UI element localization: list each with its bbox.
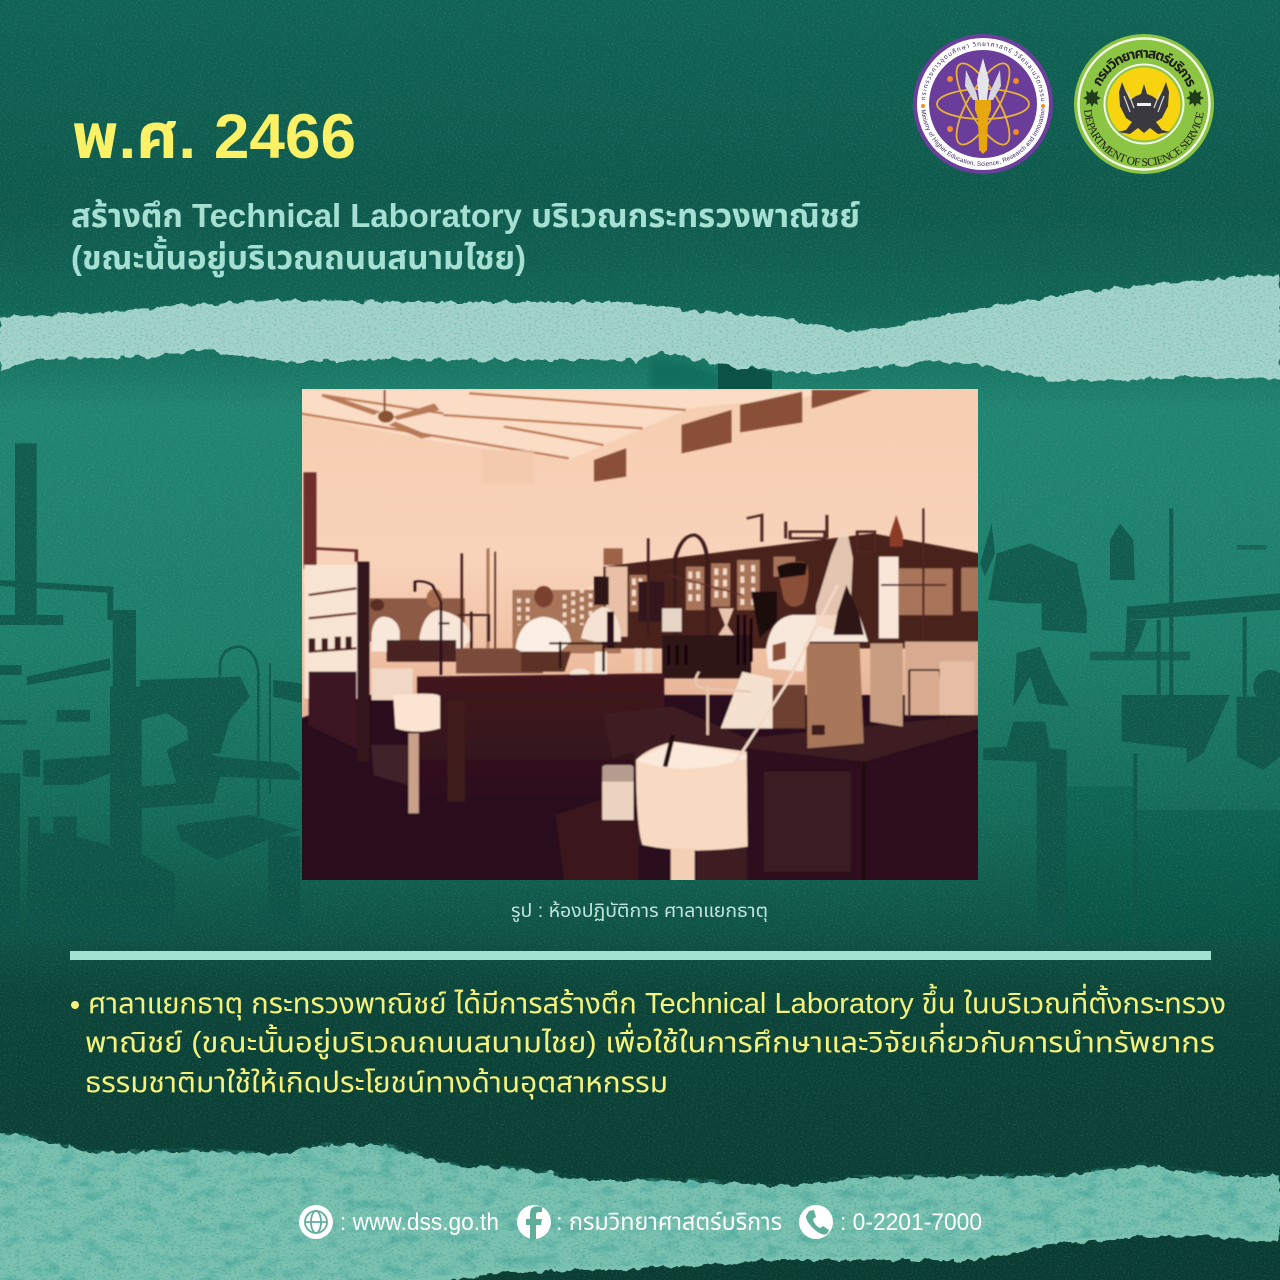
- top shelf glassware: [746, 512, 878, 543]
- subtitle: สร้างตึก Technical Laboratory บริเวณกระทรวงพาณิชย์: [71, 197, 860, 234]
- subtitle: (ขณะนั้นอยู่บริเวณถนนสนามไชย): [71, 235, 526, 278]
- apparatus on bench: [721, 672, 773, 728]
- front bench: [664, 706, 978, 762]
- back wall, mid-room: [369, 598, 465, 642]
- big white sink: [636, 742, 748, 850]
- contact row: [299, 1205, 982, 1239]
- bullet: [71, 1001, 79, 1009]
- worker, rear: [594, 577, 609, 605]
- facebook page: : กรมวิทยาศาสตร์บริการ: [556, 1209, 782, 1236]
- near bottles: [905, 642, 980, 715]
- photo: historic laboratory: [300, 389, 980, 885]
- phone number: : 0-2201-7000: [840, 1209, 982, 1236]
- rear bench: [417, 673, 664, 818]
- shadow under torn strip: [650, 358, 772, 389]
- subtitle: [71, 197, 860, 278]
- icon: facebook: [517, 1205, 551, 1239]
- background: ghosted laboratory image, left side: [0, 443, 302, 940]
- worker, foreground: [777, 561, 808, 607]
- tall metal cylinder: [807, 643, 864, 748]
- worker, far left: [370, 599, 384, 611]
- body text: พาณิชย์ (ขณะนั้นอยู่บริเวณถนนสนามไชย) เพื่อใช้ในการศึกษาและวิจัยเกี่ยวกับการนำทรัพยากร: [85, 1022, 1215, 1060]
- worker, second: [427, 589, 442, 608]
- logo: Department of Science Service: [1074, 34, 1214, 174]
- body text: ศาลาแยกธาตุ กระทรวงพาณิชย์ ได้มีการสร้างตึก Technical Laboratory ขึ้น ในบริเวณที่ตั้งกระทรวง: [88, 983, 1226, 1020]
- stand apparatus: [672, 532, 710, 634]
- logo: Ministry of Higher Education, Science, Research and Innovation: Ministry of Higher Education, Science, Research and Innovation: [921, 108, 1045, 166]
- photo caption: รูป : ห้องปฏิบัติการ ศาลาแยกธาตุ: [511, 899, 768, 923]
- icon: phone: [799, 1205, 833, 1239]
- divider bar: [70, 951, 1211, 960]
- icon: globe: [299, 1205, 333, 1239]
- logo: Ministry of Higher Education, Science, Research and Innovation: กระทรวงการอุดมศึกษา วิทยาศาสตร์ วิจัยและนวัตกรรม: [922, 42, 1044, 102]
- tall white tube: [879, 557, 898, 638]
- logo: Ministry of Higher Education, Science, Research and Innovation: [913, 34, 1053, 174]
- left column and shelves: [303, 472, 316, 569]
- website: : www.dss.go.th: [340, 1209, 499, 1236]
- dark lower room underlay: [300, 695, 980, 885]
- logo: Department of Science Service: DEPARTMENT OF SCIENCE SERVICE: [1084, 109, 1204, 166]
- garuda emblem: [1118, 82, 1170, 134]
- sink left: [372, 668, 413, 700]
- body text: ธรรมชาติมาใช้ให้เกิดประโยชน์ทางด้านอุตสาหกรรม: [85, 1067, 668, 1099]
- ceiling: [302, 390, 813, 460]
- jar on stool: [372, 745, 408, 785]
- torn paper strip: bottom: [0, 1125, 1280, 1280]
- window reveal behind lab: [502, 449, 535, 456]
- worker, centre: [534, 586, 553, 607]
- logo: Department of Science Service: กรมวิทยาศาสตร์บริการ: [1094, 50, 1194, 87]
- body text: [71, 983, 1226, 1099]
- background: ghosted laboratory image, right side: [980, 508, 1280, 940]
- torn paper strip: top: [0, 273, 1280, 382]
- right cabinets: [604, 533, 980, 648]
- ceiling fan: [382, 389, 386, 412]
- high windows: [594, 448, 626, 482]
- title: พ.ศ. 2466: [72, 102, 356, 172]
